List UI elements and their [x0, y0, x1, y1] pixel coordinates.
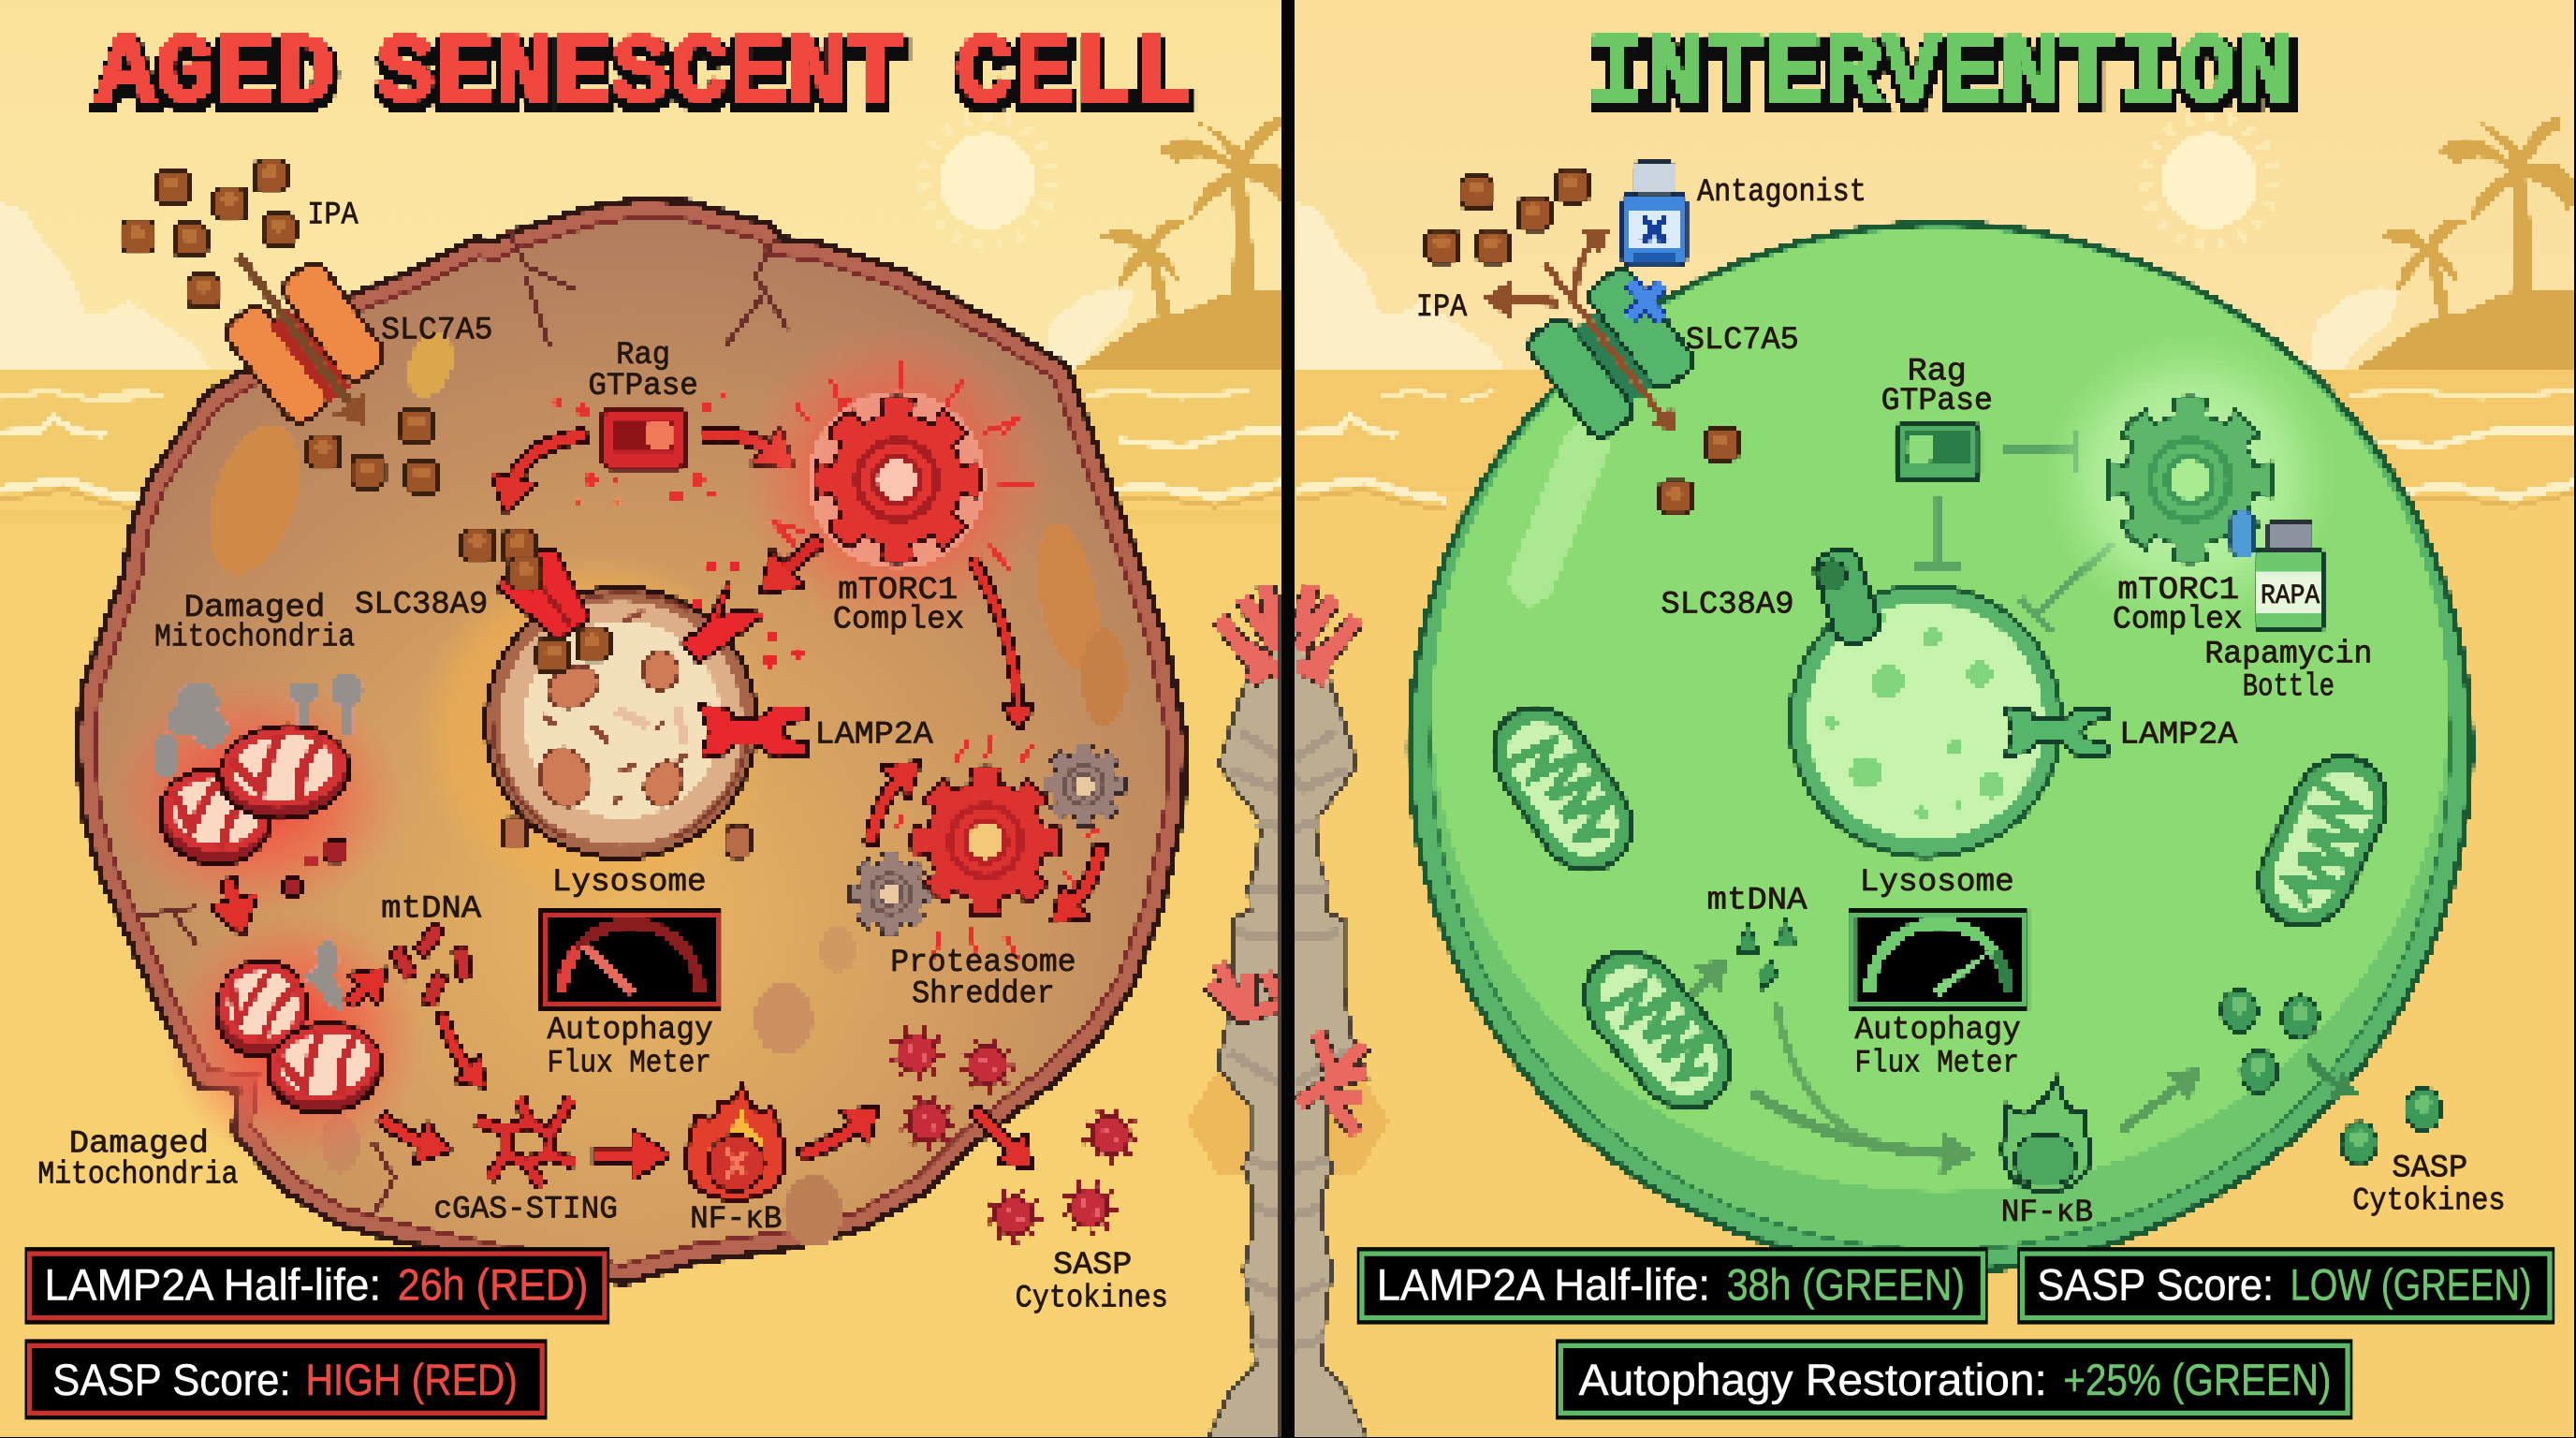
arrow: Rag to lysosome: [511, 435, 585, 490]
label: Rag GTPase: Rag: [616, 338, 670, 374]
label: Damaged Mitochondria lower: Damaged: [69, 1126, 209, 1162]
label: SASP Cytokines: Cytokines: [2352, 1184, 2506, 1220]
icon: antagonist bottle: [1623, 163, 1686, 266]
arrow: mitochondria to cGAS-STING: [383, 1117, 431, 1145]
label: LAMP2A: LAMP2A: [815, 717, 933, 753]
icon: mTORC1 gear: [2042, 332, 2338, 627]
callout: LAMP2A half-life: LAMP2A Half-life:: [44, 1260, 381, 1310]
label: Damaged Mitochondria lower: [37, 1126, 238, 1194]
title: aged senescent cell: AGED: [97, 24, 337, 137]
title: aged senescent cell: AGED: [95, 18, 335, 130]
icon: rapamycin bottle: [2231, 511, 2324, 631]
icon: mtDNA fragments: [1736, 920, 1797, 990]
label: Damaged Mitochondria lower: Mitochondria: [37, 1158, 238, 1194]
panel: aged senescent cell: [0, 0, 1314, 1438]
label: Rapamycin Bottle: Bottle: [2243, 669, 2334, 705]
label: Autophagy Flux Meter: [1855, 1013, 2021, 1081]
icon: mtDNA fragments: [388, 923, 473, 1007]
arrow: cGAS-STING to NF-kB: [594, 1152, 646, 1158]
label: SLC38A9: SLC38A9: [1661, 588, 1794, 624]
coral lower: [1209, 962, 1278, 1016]
callout: LAMP2A half-life: 38h (GREEN): [1727, 1260, 1965, 1310]
label: mTORC1 Complex: Complex: [2113, 602, 2243, 638]
callout: SASP score: HIGH (RED): [305, 1356, 518, 1405]
icon: SLC7A5 blocked transporter: [1501, 238, 1699, 443]
label: Damaged Mitochondria upper: Damaged: [184, 591, 326, 626]
icon: LAMP2A: [701, 707, 805, 756]
arrow: NF-kB to cytokines: [801, 1121, 862, 1155]
label: Proteasome Shredder: Shredder: [912, 977, 1055, 1013]
rock column: [1281, 601, 1370, 1438]
label: Lysosome: Lysosome: [1860, 865, 2014, 901]
arrow: mTORC1 to proteasome: [973, 560, 1018, 713]
title: aged senescent cell: SENESCENT: [376, 18, 905, 130]
label: NF-kB: NF-κB: [2001, 1196, 2093, 1231]
coral lower: [1298, 1032, 1367, 1134]
icon: SLC38A9 receptor: [461, 529, 609, 672]
icon: damaged mitochondria lower: [165, 910, 427, 1167]
icon: IPA particles: [122, 159, 439, 493]
callout: SASP score: SASP Score:: [52, 1356, 291, 1405]
inhibition lines: [1915, 431, 2113, 631]
callout: SASP score: SASP Score:: [2037, 1260, 2274, 1310]
label: Rag GTPase: Rag: [1908, 354, 1967, 389]
callout: LAMP2A half-life: [24, 1247, 609, 1325]
label: mtDNA: mtDNA: [381, 891, 482, 927]
icon: NF-kB flame: [687, 1081, 785, 1199]
callout: LAMP2A half-life: LAMP2A Half-life:: [1377, 1260, 1710, 1310]
coral top: [1298, 585, 1357, 681]
label: Damaged Mitochondria upper: [154, 591, 355, 656]
icon: healthy mitochondrion upper left: [1471, 685, 1654, 892]
icon: mTORC1 gear: [739, 322, 1055, 638]
arrow: mtDNA to cGAS-STING: [442, 1014, 473, 1075]
icon: healthy mitochondrion right: [2239, 738, 2407, 946]
label: RAPA: RAPA: [2261, 580, 2320, 611]
label: cGAS-STING: cGAS-STING: [433, 1193, 618, 1228]
callout: LAMP2A half-life: [1357, 1247, 1988, 1325]
label: Autophagy Flux Meter: Autophagy: [1855, 1013, 2021, 1049]
label: IPA: IPA: [307, 198, 359, 234]
coral top: [1219, 585, 1278, 681]
icon: Rag GTPase switch: [553, 391, 726, 505]
label: IPA: IPA: [1416, 290, 1468, 326]
icon: proteasome shredder gears: [856, 736, 1120, 961]
label: SLC7A5: SLC7A5: [1686, 323, 1799, 359]
icon: autophagy flux meter: [1848, 909, 2029, 1010]
title: aged senescent cell: CELL: [955, 18, 1193, 130]
label: SLC7A5: SLC7A5: [381, 314, 493, 349]
label: Rapamycin Bottle: [2204, 637, 2372, 705]
label: Proteasome Shredder: [890, 946, 1076, 1013]
icon: LAMP2A: [2004, 707, 2108, 756]
arrow: mitochondria down: [228, 881, 237, 912]
title: aged senescent cell: SENESCENT: [378, 24, 907, 137]
label: mTORC1 Complex: Complex: [833, 602, 964, 638]
icon: SASP cytokines: [2221, 990, 2441, 1165]
arrow: Rag to mTORC1: [703, 434, 775, 453]
label: Rapamycin Bottle: Rapamycin: [2204, 637, 2372, 672]
icon: SLC7A5 transporter: [220, 255, 390, 429]
callout: autophagy restoration: [1556, 1339, 2352, 1419]
label: Autophagy Flux Meter: Autophagy: [547, 1013, 713, 1049]
label: SASP Cytokines: [2352, 1152, 2506, 1220]
label: Autophagy Flux Meter: Flux Meter: [547, 1046, 711, 1081]
callout: autophagy restoration: +25% (GREEN): [2063, 1356, 2331, 1405]
arrow: mtDNA to NF-kB: [1776, 1003, 1906, 1151]
lysosome: [1788, 583, 2063, 859]
callout: SASP score: [24, 1339, 547, 1419]
icon: cGAS-STING: [476, 1097, 575, 1186]
divider: [1281, 0, 1295, 1438]
label: Rag GTPase: GTPase: [588, 369, 698, 404]
label: Rag GTPase: GTPase: [1881, 384, 1993, 419]
arrow: mitochondrion to NF-kB: [1751, 1091, 1952, 1153]
icon: NF-kB flame: [2003, 1075, 2090, 1193]
label: mTORC1 Complex: mTORC1: [838, 573, 958, 609]
label: Damaged Mitochondria upper: Mitochondria: [154, 621, 355, 656]
label: SLC38A9: SLC38A9: [355, 588, 488, 624]
icon: IPA particles: [1426, 169, 1738, 514]
panel: intervention: [1281, 0, 2576, 1438]
title: aged senescent cell: CELL: [956, 24, 1194, 137]
title: intervention: INTERVENTION: [1588, 24, 2297, 137]
lysosome: [417, 553, 772, 909]
rock column: [1206, 601, 1295, 1438]
callout: LAMP2A half-life: 26h (RED): [398, 1260, 588, 1310]
icon: autophagy flux meter: [539, 909, 723, 1010]
arrow: mitochondria to mtDNA: [350, 983, 372, 1003]
label: SASP Cytokines: [1016, 1248, 1168, 1316]
callout: SASP score: [2017, 1247, 2554, 1325]
label: mTORC1 Complex: mTORC1: [2117, 573, 2239, 609]
beach background: [1292, 0, 2576, 1438]
icon: SASP cytokines: [894, 1030, 1134, 1239]
title: aged senescent cell: [95, 18, 1194, 137]
icon: healthy mitochondrion lower: [1561, 929, 1754, 1132]
label: LAMP2A: LAMP2A: [2119, 717, 2238, 753]
label: SASP Cytokines: SASP: [2392, 1152, 2467, 1187]
icon: damaged receptor claw: [683, 561, 804, 668]
label: Autophagy Flux Meter: Flux Meter: [1855, 1046, 2019, 1081]
arrow: mitochondrion to mtDNA: [1690, 973, 1714, 996]
label: mTORC1 Complex: [2113, 573, 2243, 638]
cell body: [77, 198, 1186, 1284]
label: SASP Cytokines: Cytokines: [1016, 1281, 1168, 1316]
label: Antagonist: Antagonist: [1697, 175, 1866, 211]
label: Autophagy Flux Meter: [547, 1013, 713, 1081]
icon: Rag GTPase switch: [1895, 424, 1980, 481]
label: Proteasome Shredder: Proteasome: [890, 946, 1076, 981]
label: mTORC1 Complex: [833, 573, 964, 638]
label: Rag GTPase: [588, 338, 698, 404]
callout: autophagy restoration: Autophagy Restoration:: [1579, 1356, 2047, 1405]
icon: SLC38A9 receptor: [1810, 544, 1883, 649]
arrow: mTORC1 to lysosome: [779, 540, 818, 577]
label: Rag GTPase: [1881, 354, 1993, 419]
title: intervention: INTERVENTION: [1587, 18, 2295, 130]
label: NF-kB: NF-κB: [690, 1202, 782, 1238]
label: mtDNA: mtDNA: [1707, 884, 1808, 919]
label: SASP Cytokines: SASP: [1053, 1248, 1132, 1284]
icon: damaged mitochondria top: [104, 674, 406, 918]
arrow: NF-kB to cytokines: [2121, 1081, 2185, 1131]
label: Lysosome: Lysosome: [552, 865, 707, 901]
cell body: [1406, 220, 2474, 1275]
beach background: [0, 0, 1314, 1438]
